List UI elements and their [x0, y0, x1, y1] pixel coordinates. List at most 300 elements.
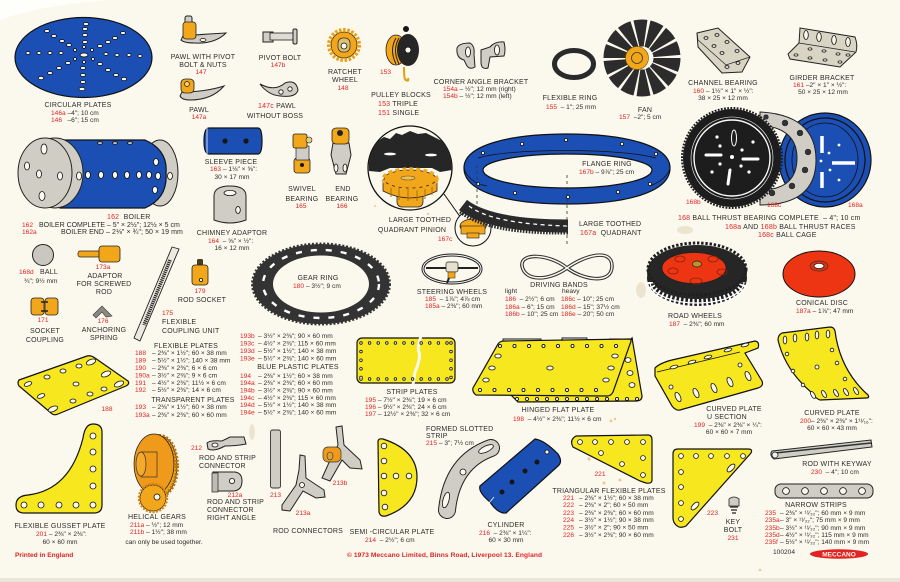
label: connector 212a: ROD AND STRIP: [207, 499, 264, 506]
panel: cylinder: [479, 439, 560, 544]
icon: connector 213a: [282, 455, 325, 511]
panel: pawl with pivot bolt: 147: [195, 69, 207, 76]
icon: adaptor: [78, 246, 120, 262]
label: sleeve piece: 30 × 17 mm: [214, 174, 250, 181]
label: gear ring: GEAR RING: [297, 275, 339, 282]
text: transparent plates: TRANSPARENT PLATES: [151, 397, 235, 404]
text: flexible plates sizes: 188: [135, 350, 146, 357]
icon: pawl without boss: [260, 82, 298, 96]
text: flexible plates sizes: – 2⅜" × 2⅜"; 6 × 6 cm: [152, 365, 218, 372]
label: channel bearing: 38 × 25 × 12 mm: [698, 95, 748, 102]
panel: flange ring: [464, 134, 670, 204]
label: ball: [19, 269, 58, 285]
label: narrow strips: – 2⅜" × ¹¹⁄₃₂"; 60 mm × 9 mm: [780, 510, 866, 517]
text: blue plastic plates heading: BLUE PLASTIC PLATES: [257, 364, 339, 371]
label: coupling unit: 175: [162, 310, 173, 317]
text: flexible plates sizes: – 2⅜" × 1½"; 60 × 38 mm: [152, 349, 227, 357]
label: ball thrust: 168 BALL THRUST BEARING COMPLETE – 4"; 10 cm: [678, 215, 861, 222]
label: rod with keyway: [802, 461, 872, 476]
label: connector 212: [191, 445, 256, 470]
label: connector 212: 212: [191, 445, 202, 452]
label: helical gears: [125, 514, 203, 546]
label: cylinder: CYLINDER: [488, 522, 524, 529]
label: swivel bearing: 165: [295, 203, 307, 210]
label: flange ring: FLANGE RING: [582, 161, 632, 168]
label: connector 212a: CONNECTOR: [207, 507, 254, 514]
text: triangular flexible plates list: [552, 488, 666, 539]
label: girder bracket: 161 –2" × 1" × ½":: [793, 81, 846, 89]
label: cylinder: [479, 522, 532, 544]
arrow: pointer line to small pinion: [444, 194, 461, 218]
label: narrow strips: – 3½" × ¹¹⁄₃₂"; 90 mm × 9 mm: [780, 524, 866, 532]
text: 194 series sizes: – 5½" × 1½"; 140 × 38 mm: [258, 401, 337, 409]
icon: girder bracket: [788, 28, 857, 67]
logo: Meccano: MECCANO: [822, 552, 856, 558]
panel: road wheels: [647, 243, 747, 328]
label: slotted strip: STRIP: [426, 433, 448, 440]
icon: gusset plate: [16, 424, 102, 513]
text: 194 series sizes: 194c: [240, 395, 255, 402]
icon: pulley block: [386, 26, 419, 81]
icon: flexible ring: [554, 50, 594, 78]
label: quadrant: [579, 221, 642, 237]
panel: semi-circular plate: [350, 439, 435, 544]
text: 194 series sizes: – 3½" × 2⅜"; 90 × 60 mm: [258, 386, 333, 394]
text: flexible plates sizes: 189: [135, 358, 146, 364]
icon: quadrant: [460, 165, 568, 245]
icon: gear ring: [252, 244, 390, 324]
panel: key bolt: [724, 497, 743, 542]
panel: rod with keyway: [771, 440, 872, 476]
panel: anchoring spring: [82, 306, 126, 342]
label: steering wheels: 185a – 2⅜"; 60 mm: [425, 303, 483, 310]
label: boiler: BOILER END – 2⅛" × ¾"; 50 × 19 mm: [61, 229, 183, 236]
text: triangular flexible plates list: 221: [563, 495, 574, 502]
label: cylinder: 60 × 30 mm: [488, 537, 524, 544]
text: 194 series sizes: 194a: [240, 380, 255, 387]
panel: strip plates: [357, 336, 455, 418]
label: rod with keyway: ROD WITH KEYWAY: [802, 461, 872, 468]
label: flexible ring: [543, 95, 597, 111]
text: 194 series sizes: – 2⅜" × 2⅜"; 60 × 60 mm: [258, 380, 333, 387]
label: road wheels: [668, 313, 725, 328]
icon: small pinion: [455, 210, 491, 246]
label: U section: CURVED PLATE: [706, 406, 762, 413]
footer: copyright: © 1973 Meccano Limited, Binns Road, Liverpool 13. England: [347, 551, 542, 559]
panel: formed slotted strip: [426, 426, 495, 510]
label: fan: FAN: [638, 107, 652, 114]
panel: triangular plate 221: [572, 435, 652, 483]
label: adaptor: [77, 264, 131, 296]
text: flexible plates sizes: 190: [135, 365, 146, 372]
label: pawl without boss: 147c PAWL: [258, 103, 296, 110]
label: narrow strips: NARROW STRIPS: [785, 502, 847, 509]
label: driving bands: heavy: [562, 288, 580, 295]
icon: cylinder: [480, 439, 560, 513]
label: driving bands: 186b – 10"; 25 cm: [505, 311, 559, 318]
panel: pawl with pivot bolt: BOLT & NUTS: [179, 62, 227, 69]
icon: connector 212: [207, 437, 246, 450]
label: ball thrust: 168b: [686, 199, 701, 206]
label: narrow strips: – 4½" × ¹¹⁄₃₂"; 115 mm × 9 mm: [780, 531, 869, 539]
icon: conical disc: [783, 251, 855, 297]
panel: triangular plate 223: [673, 449, 752, 527]
text: triangular flexible plates list: – 2⅜" × 2⅜"; 60 × 60 mm: [579, 510, 654, 517]
label: end bearing: BEARING: [326, 196, 358, 203]
label: connector 212: CONNECTOR: [199, 463, 246, 470]
icon: slotted strip: [441, 443, 495, 510]
label: key bolt: BOLT: [724, 527, 743, 534]
text: transparent plates: 193a: [135, 412, 150, 419]
panel: rod socket: [178, 259, 227, 304]
label: adaptor: 173a: [96, 264, 111, 271]
icon: socket coupling: [31, 298, 58, 315]
panel: pulley blocks: 153 TRIPLE: [378, 101, 418, 108]
label: boiler: [22, 214, 183, 236]
label: gear ring: [293, 275, 341, 290]
label: gear ring: 180 – 3½"; 9 cm: [293, 282, 341, 290]
panel: ratchet wheel: WHEEL: [332, 77, 358, 84]
label: connector 212: ROD AND STRIP: [199, 455, 256, 462]
icon: fan: [617, 33, 667, 83]
label: gusset: 201 – 2⅜" × 2⅜":: [36, 531, 87, 538]
label: ball: 168d: [19, 269, 34, 276]
text: 194 series sizes: – 4½" × 2⅜"; 115 × 60 mm: [258, 394, 336, 402]
label: hinged plate: [513, 407, 602, 423]
label: narrow strips: 235a: [765, 517, 780, 524]
panel: fan: [617, 33, 667, 121]
panel: curved plate U section: [655, 341, 762, 436]
label: sleeve piece: [205, 159, 257, 181]
label: cylinder: 216 – 2⅜" × 1¼":: [479, 530, 532, 537]
icon: ratchet wheel: [329, 30, 359, 60]
icon: pawl small: [180, 79, 224, 100]
label: girder bracket: 50 × 25 × 12 mm: [798, 89, 848, 96]
label: pinion: QUADRANT PINION: [378, 227, 446, 234]
icon: pivot bolt: [263, 29, 297, 44]
label: boiler: BOILER COMPLETE – 5" × 2½"; 12½ × 5 cm: [39, 221, 180, 229]
label: narrow strips: – 5½" × ¹¹⁄₃₂"; 140 mm × 9 mm: [780, 538, 870, 546]
label: circular plates: CIRCULAR PLATES: [44, 102, 112, 109]
label: ball thrust: 168c: [767, 202, 782, 209]
label: 223: 223: [707, 510, 718, 517]
text: 194 series sizes: 194d: [240, 402, 255, 409]
panel: rod connectors: [270, 426, 362, 535]
label: swivel bearing: BEARING: [286, 196, 318, 203]
icon: sleeve piece: [204, 128, 262, 154]
panel: flexible and transparent plates list: [135, 343, 235, 419]
label: flexible ring: FLEXIBLE RING: [543, 95, 597, 102]
label: chimney adaptor: 16 × 12 mm: [214, 245, 250, 252]
label: U section: [694, 406, 762, 436]
icon: magnified pinion: [368, 126, 452, 210]
text: triangular flexible plates list: – 2⅜" × 2"; 60 × 50 mm: [579, 502, 649, 509]
icon: steering wheel: [423, 255, 481, 283]
text: triangular flexible plates list: 222: [563, 502, 574, 509]
panel: sleeve piece: [204, 128, 262, 181]
icon: rod socket: [192, 259, 208, 285]
text: 194 series sizes: 194: [240, 373, 251, 380]
label: helical gears: can only be used together.: [125, 539, 203, 546]
label: boiler: 162 BOILER: [107, 214, 150, 221]
label: quadrant: LARGE TOOTHED: [579, 221, 641, 228]
text: transparent plates: – 2⅜" × 1½"; 60 × 38 mm: [152, 403, 227, 411]
label: quadrant: 167a QUADRANT: [580, 230, 642, 237]
text: transparent plates: [135, 397, 235, 419]
text: flexible plates sizes: – 5½" × 2⅜"; 14 × 6 cm: [152, 386, 221, 394]
icon: swivel bearing: [293, 134, 312, 173]
icon: strip plate: [357, 336, 455, 385]
label: conical disc: CONICAL DISC: [796, 300, 848, 307]
panel: large toothed quadrant: [460, 165, 642, 245]
icon: U section plate: [655, 341, 762, 410]
label: flange ring: 167b – 9⅞"; 25 cm: [579, 169, 635, 176]
label: ball: ¾"; 9½ mm: [24, 277, 58, 285]
icon: black ball thrust race: [682, 108, 782, 208]
label: strip plates: 195 – 7½" × 2⅜"; 19 × 6 cm: [365, 396, 447, 404]
label: curved plate: 60 × 60 × 43 mm: [807, 425, 857, 432]
label: pivot bolt: PIVOT BOLT: [259, 55, 302, 62]
text: 194 series sizes: [240, 372, 337, 416]
text: 193 series sizes: 193c: [240, 340, 255, 348]
label: pawl: PAWL: [189, 107, 209, 114]
label: driving bands: 186a – 6"; 15 cm: [505, 304, 555, 311]
panel: chimney adaptor: [197, 186, 267, 252]
label: adaptor: FOR SCREWED: [77, 281, 131, 288]
icon: corner brackets: [457, 42, 505, 68]
footer: printed in England: Printed in England: [15, 552, 73, 559]
panel: flexible coupling unit: [134, 247, 220, 341]
label: curved plate: [800, 410, 873, 432]
panel: pivot bolt: 147b: [271, 62, 286, 69]
label: rod connectors: ROD CONNECTORS: [273, 528, 343, 535]
panel: pawl without boss: WITHOUT BOSS: [247, 113, 303, 120]
icon: triangular plate 223: [673, 449, 752, 527]
panel: ball thrust bearing: [678, 108, 871, 239]
label: flexible ring: 155 – 1"; 25 mm: [546, 104, 597, 111]
label: corner bracket: 154b – ½"; 12 mm (left): [443, 92, 512, 100]
label: ball thrust: 168c BALL CAGE: [758, 232, 817, 239]
label: steering wheels: STEERING WHEELS: [417, 289, 487, 296]
logo: Meccano: [810, 549, 868, 559]
label: connector 212a: RIGHT ANGLE: [207, 515, 256, 522]
panel: flexible plate 188: [18, 356, 129, 415]
panel: curved plate: [778, 327, 873, 432]
panel: channel bearing: [688, 28, 758, 102]
panel: fan: 157 –2"; 5 cm: [619, 114, 662, 121]
panel: end bearing: [326, 128, 358, 210]
label: corner bracket: CORNER ANGLE BRACKET: [434, 79, 529, 86]
label: pinion: LARGE TOOTHED: [389, 217, 451, 224]
label: coupling unit: FLEXIBLE: [162, 319, 196, 326]
text: flexible plates sizes: 191: [135, 380, 146, 387]
label: road wheels: ROAD WHEELS: [668, 313, 722, 320]
label: sleeve piece: SLEEVE PIECE: [205, 159, 257, 166]
label: road wheels: 187 – 2⅜"; 60 mm: [669, 321, 725, 328]
label: ratchet wheel: RATCHET: [328, 69, 362, 76]
panel: ratchet wheel: [328, 30, 362, 92]
label: strip plates: 197 – 12½" × 2⅜"; 32 × 6 cm: [365, 410, 451, 418]
label: chimney adaptor: 164 – ⅝" × ½":: [208, 237, 253, 245]
label: end bearing: 166: [336, 203, 348, 210]
panel: rod and strip connector: [191, 437, 256, 470]
label: swivel bearing: SWIVEL: [288, 186, 316, 193]
icon: spring: [93, 306, 112, 318]
icon: curved plate: [778, 327, 869, 400]
label: pinion: [378, 217, 453, 243]
panel: adaptor: [77, 246, 131, 296]
panel: ball: [19, 244, 58, 285]
label: gusset: [14, 523, 106, 546]
icon: end bearing: [331, 128, 351, 174]
footer: print code: 100204: [773, 549, 795, 556]
panel: hinged flat plate: [473, 338, 642, 423]
label: ball thrust: 168a: [848, 202, 863, 209]
label: socket coupling: 171: [37, 317, 49, 324]
icon: driving band: [522, 255, 612, 279]
label: steering wheels: [417, 289, 487, 310]
text: 193 series sizes: [240, 332, 337, 362]
icon: helical gears: [134, 434, 177, 512]
label: driving bands: 186d – 15"; 37½ cm: [561, 303, 620, 311]
label: conical disc: [796, 300, 854, 315]
text: flexible plates heading: FLEXIBLE PLATES: [154, 343, 218, 350]
text: 193 series sizes: – 3½" × 2⅜"; 90 × 60 mm: [258, 332, 333, 340]
panel: swivel bearing: [286, 134, 318, 210]
label: hinged plate: 198 – 4½" × 2⅜"; 11½ × 6 cm: [513, 415, 602, 423]
panel: right angle connector: [207, 472, 264, 522]
panel: gear ring: [252, 244, 390, 324]
panel: narrow strips: [765, 484, 873, 546]
label: strip plates: [365, 389, 451, 418]
label: rod connectors: [270, 480, 348, 535]
icon: circular plate: [15, 18, 152, 98]
panel: boiler: [18, 138, 183, 236]
label: socket coupling: COUPLING: [26, 337, 64, 344]
label: rod with keyway: 230 – 4"; 10 cm: [811, 469, 859, 476]
label: swivel bearing: [286, 186, 318, 210]
panel: steering wheels: [417, 255, 487, 310]
label: boiler: 162a: [22, 229, 37, 236]
panel: flexible ring: [543, 50, 597, 111]
icon: key bolt: [729, 497, 739, 513]
label: narrow strips: – 3" × ¹¹⁄₃₂"; 75 mm × 9 mm: [780, 517, 860, 524]
label: slotted strip: [426, 426, 493, 447]
label: semi-circular plate: [350, 529, 435, 544]
text: flexible plates sizes: – 5½" × 1½"; 140 × 38 mm: [152, 356, 231, 364]
panel: flexible gusset plate: [14, 424, 106, 546]
label: girder bracket: [789, 75, 855, 96]
icon: connector 213b: [322, 426, 362, 481]
label: semi-circular plate: SEMI -CIRCULAR PLATE: [350, 529, 435, 536]
label: steering wheels: 185 – 1⅞"; 4⅞ cm: [425, 296, 481, 303]
text: transparent plates: – 2⅜" × 2⅜"; 60 × 60 mm: [152, 412, 227, 419]
panel: ratchet wheel: 148: [337, 85, 349, 92]
label: U section: U SECTION: [707, 414, 747, 421]
panel: pulley blocks: [371, 26, 431, 117]
label: circular plates: [44, 102, 112, 124]
text: 193 series sizes: 193e: [240, 356, 255, 362]
text: 194 series sizes: 194b: [240, 388, 255, 394]
panel: pivot bolt: [259, 29, 302, 69]
text: transparent plates: 193: [135, 404, 146, 411]
panel: socket coupling: [26, 298, 64, 344]
text: 194 series sizes: – 2⅜" × 1½"; 60 × 38 mm: [258, 372, 333, 380]
panel: pulley blocks: PULLEY BLOCKS: [371, 92, 431, 99]
label: U section: 60 × 60 × 7 mm: [706, 429, 753, 436]
icon: narrow strip: [775, 484, 873, 498]
icon: rod 213: [270, 430, 280, 488]
label: flange ring: [579, 161, 635, 176]
text: flexible plates sizes: [135, 349, 231, 394]
label: key bolt: 231: [727, 535, 739, 542]
label: semi-circular plate: 214 – 2½"; 6 cm: [365, 536, 415, 544]
label: driving bands: [505, 282, 620, 318]
icon: rod with keyway: [771, 440, 872, 459]
label: coupling unit: COUPLING UNIT: [162, 328, 220, 335]
panel: pawl with pivot bolt: [171, 16, 236, 76]
label: adaptor: ADAPTOR: [87, 273, 123, 280]
icon: flexible plate: [18, 356, 129, 415]
label: slotted strip: FORMED SLOTTED: [426, 426, 493, 433]
label: chimney adaptor: CHIMNEY ADAPTOR: [197, 230, 267, 237]
label: 221: 221: [594, 471, 606, 478]
label: pulley blocks: 153: [380, 69, 391, 76]
label: ball thrust: [678, 199, 863, 239]
label: 188: 188: [101, 406, 113, 413]
label: girder bracket: GIRDER BRACKET: [789, 75, 855, 82]
label: helical gears: 211a – ½"; 12 mm: [130, 521, 184, 529]
icon: channel bearing: [697, 28, 750, 73]
icon: ball cage: [760, 112, 816, 205]
panel: circular plates: [15, 18, 152, 124]
panel: blue plastic plates list: [240, 332, 339, 416]
icon: connector 212a: [212, 472, 242, 492]
panel: helical gears: [125, 434, 203, 546]
text: 194 series sizes: – 5½" × 2⅜"; 140 × 60 mm: [258, 408, 337, 416]
label: narrow strips: 235: [765, 510, 776, 517]
text: triangular flexible plates list: 226: [563, 532, 574, 539]
text: triangular flexible plates list: – 2⅜" × 1½"; 60 × 38 mm: [579, 494, 654, 502]
label: corner bracket: 154a – ½"; 12 mm (right): [443, 85, 516, 93]
label: narrow strips: [765, 502, 870, 546]
label: chimney adaptor: [197, 230, 267, 252]
text: 193 series sizes: – 5½" × 2⅜"; 140 × 60 mm: [258, 354, 337, 362]
text: 193 series sizes: 193b: [240, 333, 255, 340]
label: channel bearing: 160 – 1½" × 1" × ½":: [693, 87, 754, 95]
panel: corner angle bracket: [434, 42, 529, 100]
label: rod socket: ROD SOCKET: [178, 297, 227, 304]
text: 193 series sizes: 193d: [240, 348, 255, 355]
icon: ball: [32, 244, 54, 266]
text: 193 series sizes: – 5½" × 1½"; 140 × 38 mm: [258, 347, 337, 355]
text: triangular flexible plates list: – 3½" × 2⅜"; 90 × 60 mm: [579, 531, 654, 539]
icon: flange ring: [464, 134, 670, 204]
label: helical gears: 211b – 1½"; 38 mm: [130, 528, 187, 536]
panel: pawl without boss: [247, 82, 303, 120]
label: anchoring spring: 176: [97, 318, 109, 325]
text: flexible plates sizes: – 3½" × 2⅜"; 9 × 6 cm: [152, 372, 218, 380]
label: gusset: FLEXIBLE GUSSET PLATE: [14, 523, 106, 530]
text: 194 series sizes: 194e: [240, 410, 255, 416]
label: connector 212a: 212a: [228, 492, 243, 499]
label: helical gears: HELICAL GEARS: [128, 514, 186, 521]
label: circular plates: 146a –4"; 10 cm: [51, 110, 99, 117]
text: triangular flexible plates list: 225: [563, 524, 574, 532]
label: rod connectors: 213b: [333, 480, 348, 487]
text: 193 series sizes: – 4½" × 2⅜"; 115 × 60 mm: [258, 340, 336, 348]
label: socket coupling: [26, 317, 64, 344]
